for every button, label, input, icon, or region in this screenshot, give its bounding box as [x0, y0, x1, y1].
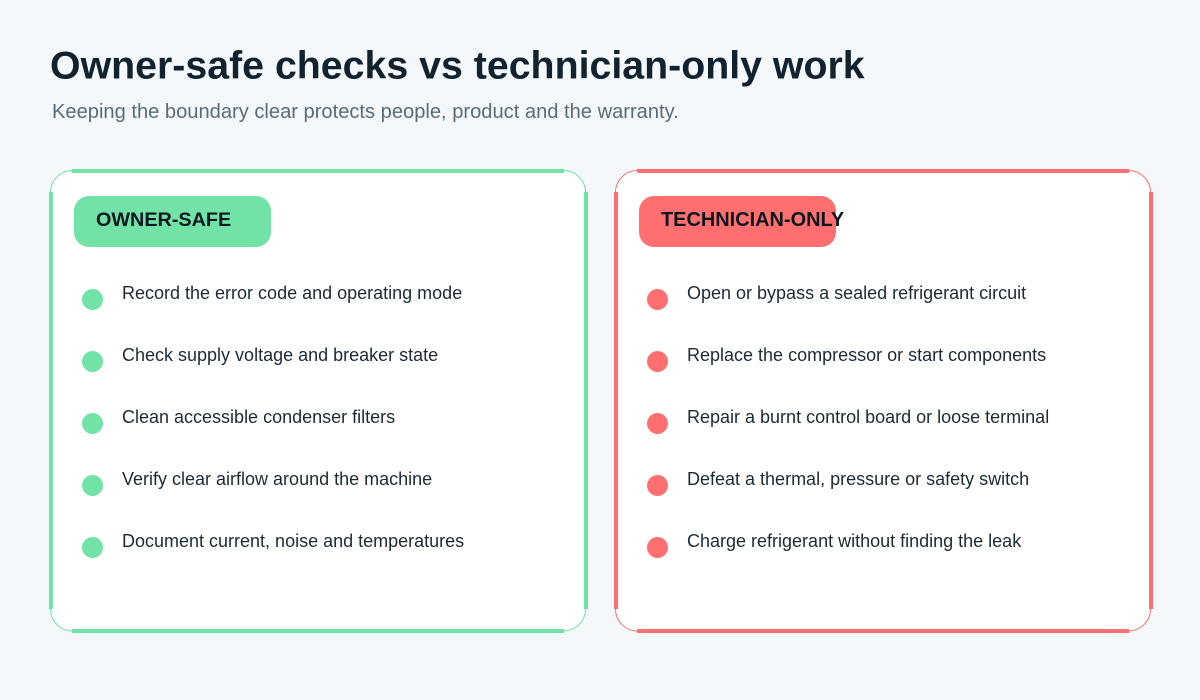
badge: owner-safe: OWNER-SAFE [96, 209, 231, 231]
list item 3: Clean accessible condenser filters [122, 407, 395, 427]
list item 2: Check supply voltage and breaker state [122, 345, 438, 365]
list item 1 [647, 283, 1026, 310]
subtitle: Keeping the boundary clear protects people, product and the warranty. [52, 101, 679, 123]
title: Owner-safe checks vs technician-only work [50, 44, 865, 88]
list item 5: Document current, noise and temperatures [122, 531, 464, 551]
badge: owner-safe [74, 196, 271, 247]
list item 1 [82, 283, 462, 310]
list item 2 [82, 345, 438, 372]
panel: owner-safe [49, 169, 588, 633]
list item 4 [82, 469, 432, 496]
list item 5 [82, 531, 464, 558]
list item 4: Defeat a thermal, pressure or safety switch [687, 469, 1029, 489]
panel: technician-only [614, 169, 1153, 633]
list item 2: Replace the compressor or start components [687, 345, 1046, 365]
list item 2 [647, 345, 1046, 372]
panel background [616, 170, 1150, 631]
list item 5 [647, 531, 1022, 558]
badge: technician-only [639, 196, 844, 247]
list item 4: Verify clear airflow around the machine [122, 469, 432, 489]
badge: technician-only: TECHNICIAN-ONLY [661, 209, 844, 231]
list item 5: Charge refrigerant without finding the leak [687, 531, 1022, 551]
list item 3 [82, 407, 395, 434]
panel background [50, 170, 586, 631]
list item 3: Repair a burnt control board or loose terminal [687, 407, 1049, 427]
panel border bars [49, 169, 588, 633]
list item 3 [647, 407, 1049, 434]
panel border bars [614, 169, 1153, 633]
list item 1: Open or bypass a sealed refrigerant circuit [687, 283, 1026, 303]
list item 1: Record the error code and operating mode [122, 283, 462, 303]
list item 4 [647, 469, 1029, 496]
